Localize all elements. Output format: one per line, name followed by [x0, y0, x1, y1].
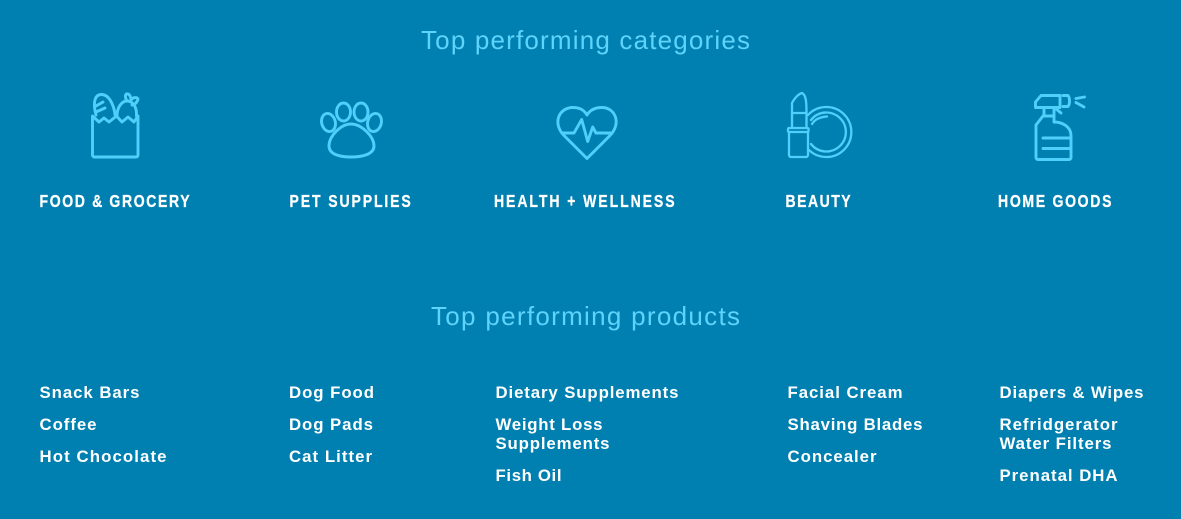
product list: beauty [788, 383, 922, 466]
product list: food and grocery [40, 383, 166, 466]
icon: paw [320, 103, 383, 157]
title: top performing products: Top performing products [431, 301, 740, 331]
product list: health and wellness: Dietary Supplements [496, 383, 678, 402]
category label: food and grocery: FOOD & GROCERY [40, 191, 190, 211]
product list: pet supplies: Dog Food [289, 383, 374, 402]
product list: pet supplies: Dog Pads [289, 415, 373, 434]
product list: home goods [1000, 383, 1144, 485]
product list: pet supplies [289, 383, 374, 466]
category label: home goods: HOME GOODS [998, 191, 1112, 211]
product list: pet supplies: Cat Litter [289, 447, 372, 466]
icon: grocery bag [92, 94, 138, 157]
product list: home goods: Water Filters [1000, 434, 1112, 453]
category label: health and wellness: HEALTH + WELLNESS [494, 191, 675, 211]
product list: home goods: Diapers & Wipes [1000, 383, 1144, 402]
product list: food and grocery: Hot Chocolate [40, 447, 166, 466]
category label: pet supplies: PET SUPPLIES [290, 191, 411, 211]
icon: spray bottle [1036, 96, 1084, 160]
product list: food and grocery: Snack Bars [40, 383, 140, 402]
product list: home goods: Prenatal DHA [1000, 466, 1118, 485]
category label: beauty: BEAUTY [786, 191, 851, 211]
title: top performing categories: Top performing categories [421, 25, 750, 55]
icon: lipstick and compact [788, 93, 851, 157]
icon: heart with pulse [558, 108, 616, 158]
product list: beauty: Facial Cream [788, 383, 902, 402]
product list: health and wellness: Weight Loss [496, 415, 602, 434]
product list: health and wellness: Fish Oil [496, 466, 562, 485]
product list: food and grocery: Coffee [40, 415, 96, 434]
product list: health and wellness [496, 383, 678, 485]
product list: health and wellness: Supplements [496, 434, 610, 453]
product list: beauty: Concealer [788, 447, 877, 466]
product list: beauty: Shaving Blades [788, 415, 922, 434]
product list: home goods: Refridgerator [1000, 415, 1118, 434]
